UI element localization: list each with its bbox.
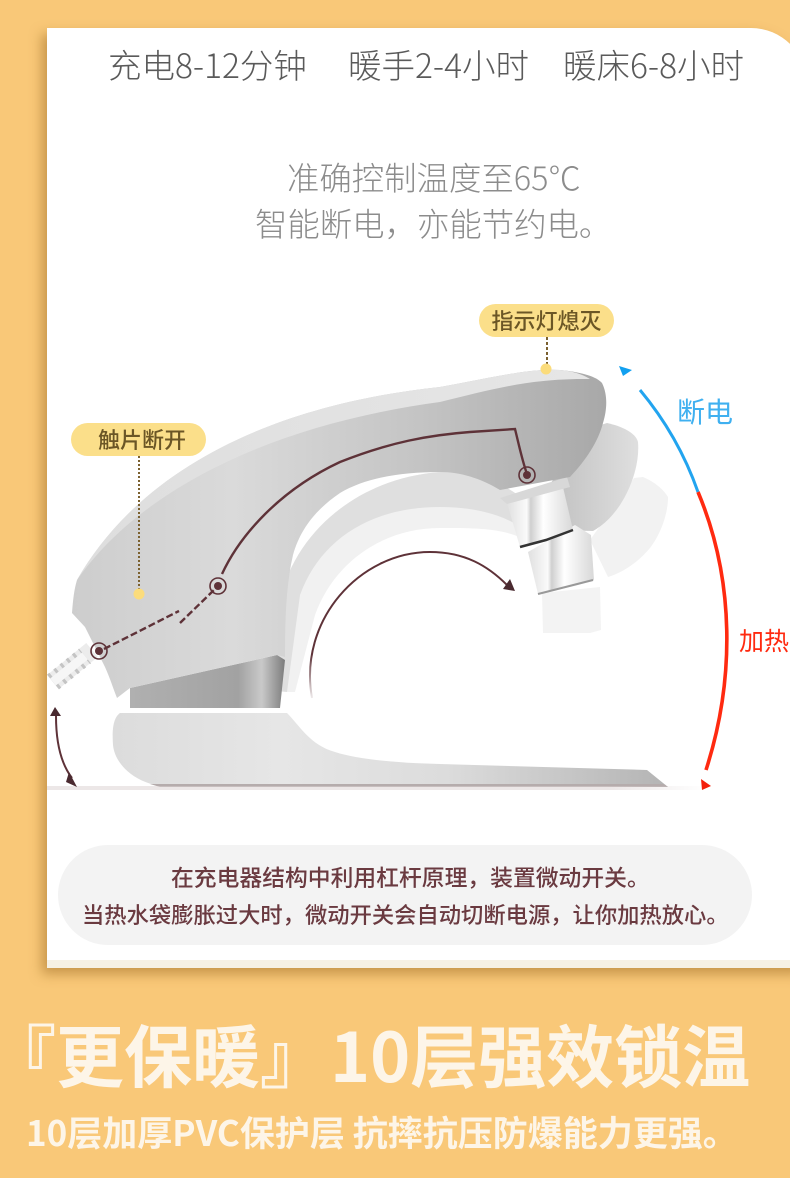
arc: heating (red)	[698, 492, 727, 790]
node: middle contact	[210, 578, 226, 594]
subheading: PVC layers: 10层加厚PVC保护层 抗摔抗压防爆能力更强。	[26, 1106, 738, 1157]
spec: charging time: 充电8-12分钟	[108, 39, 307, 88]
spec row: charge and warm times	[108, 39, 744, 88]
card bottom cream edge	[47, 960, 790, 968]
base ground shadow	[47, 786, 707, 790]
caption pill: explanation	[58, 845, 752, 945]
text block: temperature control	[255, 153, 611, 246]
arrow: rear rocking	[50, 707, 77, 787]
panel: white product card	[47, 28, 790, 968]
arrow: lever swing inside arch	[310, 552, 515, 698]
inner arch shade	[275, 472, 525, 692]
inner arch outer shade	[275, 472, 534, 692]
node: upper contact	[519, 467, 535, 483]
leader: indicator label	[540, 337, 552, 374]
indicator wire	[222, 429, 527, 574]
contact wire dashed, broken	[104, 590, 214, 649]
neck hinge	[130, 655, 285, 708]
leader: contact label	[134, 456, 144, 600]
arc: power off (blue)	[619, 366, 698, 492]
label pill: contact open: 触片断开	[98, 423, 186, 455]
stand base	[113, 713, 668, 787]
node: lower contact	[91, 643, 107, 659]
base bottom edge	[150, 784, 668, 787]
heater upper body	[72, 370, 606, 698]
line: smart power off: 智能断电，亦能节约电。	[255, 199, 611, 246]
label: heating: 加热	[739, 622, 789, 658]
body top highlight band	[77, 370, 590, 580]
caption line 1: 在充电器结构中利用杠杆原理，装置微动开关。	[171, 860, 650, 893]
ghost position: faint head	[542, 477, 668, 633]
label: power off: 断电	[677, 391, 733, 431]
ghost position: mid head	[528, 423, 638, 594]
caption line 2: 当热水袋膨胀过大时，微动开关会自动切断电源，让你加热放心。	[82, 898, 729, 930]
label pill: contact open	[71, 423, 206, 456]
heading part: 10 layers: 10层强效锁温	[330, 1003, 750, 1102]
line: temperature: 准确控制温度至65℃	[287, 153, 581, 200]
power cord	[53, 650, 92, 682]
heading: warmer 10-layer	[0, 1003, 750, 1102]
spec: hand warming time: 暖手2-4小时	[348, 39, 529, 88]
label pill: indicator off: 指示灯熄灭	[491, 304, 602, 336]
spec: bed warming time: 暖床6-8小时	[563, 39, 744, 88]
connector: metal plug	[500, 477, 573, 547]
